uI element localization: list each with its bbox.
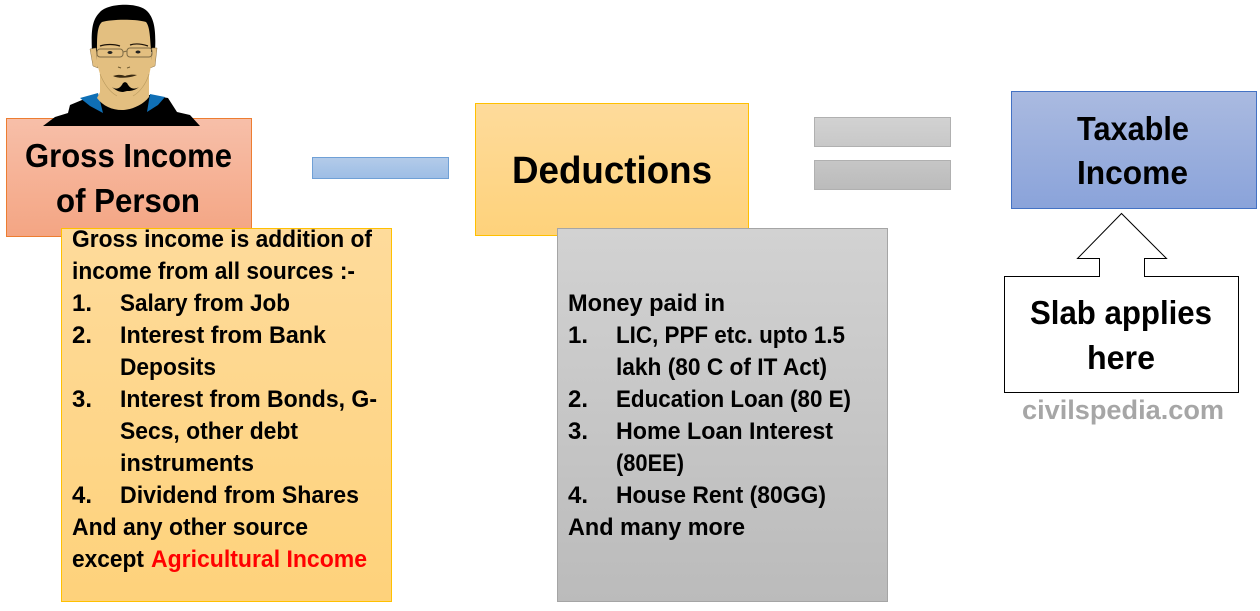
panel: taxable income [1012, 92, 1256, 208]
heading: gross income of person [25, 137, 232, 219]
text block: gross income sources list: 3. [72, 386, 92, 413]
text block: deductions list: 3. [568, 418, 588, 445]
watermark: civilspedia.com: civilspedia.com [1022, 395, 1224, 425]
heading: taxable income [1077, 110, 1189, 191]
text block: deductions list: 1. [568, 322, 588, 349]
callout: slab applies here with up arrow [1004, 214, 1238, 392]
text block: gross income sources list: 1. [72, 290, 92, 317]
icon: man with glasses and goatee [43, 5, 200, 126]
callout: slab applies here with up arrow: Slab applies [1030, 294, 1212, 331]
text block: gross income sources list: 4. [72, 482, 92, 509]
heading: gross income of person: Gross Income [25, 137, 232, 174]
text block: deductions list: And many more [568, 514, 745, 541]
text block: deductions list: Money paid in [568, 290, 725, 317]
text block: gross income sources list: Gross income is addition of [72, 226, 373, 253]
text block: deductions list: House Rent (80GG) [616, 482, 826, 509]
text block: gross income sources list [72, 226, 377, 573]
text block: gross income sources list: Salary from Job [120, 290, 290, 317]
text block: deductions list [568, 290, 851, 541]
heading: deductions: Deductions [512, 150, 712, 192]
text block: gross income sources list: And any other source [72, 514, 308, 541]
text block: deductions list: Education Loan (80 E) [616, 386, 851, 413]
heading: gross income of person: of Person [56, 182, 200, 219]
panel: deductions [476, 104, 748, 236]
text block: gross income sources list: except [72, 546, 144, 573]
heading: taxable income: Taxable [1077, 110, 1189, 147]
text block: gross income sources list: income from all sources :- [72, 258, 355, 285]
callout: slab applies here with up arrow: here [1087, 339, 1155, 376]
text block: gross income sources list: Secs, other debt [120, 418, 298, 445]
text block: deductions list: Home Loan Interest [616, 418, 833, 445]
panel: gross income of person [6, 118, 252, 236]
panel: gross income details [62, 226, 392, 602]
text block: gross income sources list: Interest from Bank [120, 322, 327, 349]
text block: gross income sources list: Deposits [120, 354, 216, 381]
text block: gross income sources list: 2. [72, 322, 92, 349]
heading: taxable income: Income [1077, 154, 1188, 191]
text block: deductions list: 4. [568, 482, 588, 509]
text block: gross income sources list: Dividend from Shares [120, 482, 359, 509]
text block: deductions list: (80EE) [616, 450, 684, 477]
text block: deductions list: 2. [568, 386, 588, 413]
panel: deductions details [558, 228, 888, 602]
icon: equals sign [814, 118, 950, 190]
text block: deductions list: LIC, PPF etc. upto 1.5 [616, 322, 845, 349]
text block: gross income sources list: Agricultural Income [151, 546, 367, 573]
text block: deductions list: lakh (80 C of IT Act) [616, 354, 827, 381]
text block: gross income sources list: instruments [120, 450, 254, 477]
text block: gross income sources list: Interest from Bonds, G- [120, 386, 377, 413]
icon: minus sign [312, 158, 448, 178]
